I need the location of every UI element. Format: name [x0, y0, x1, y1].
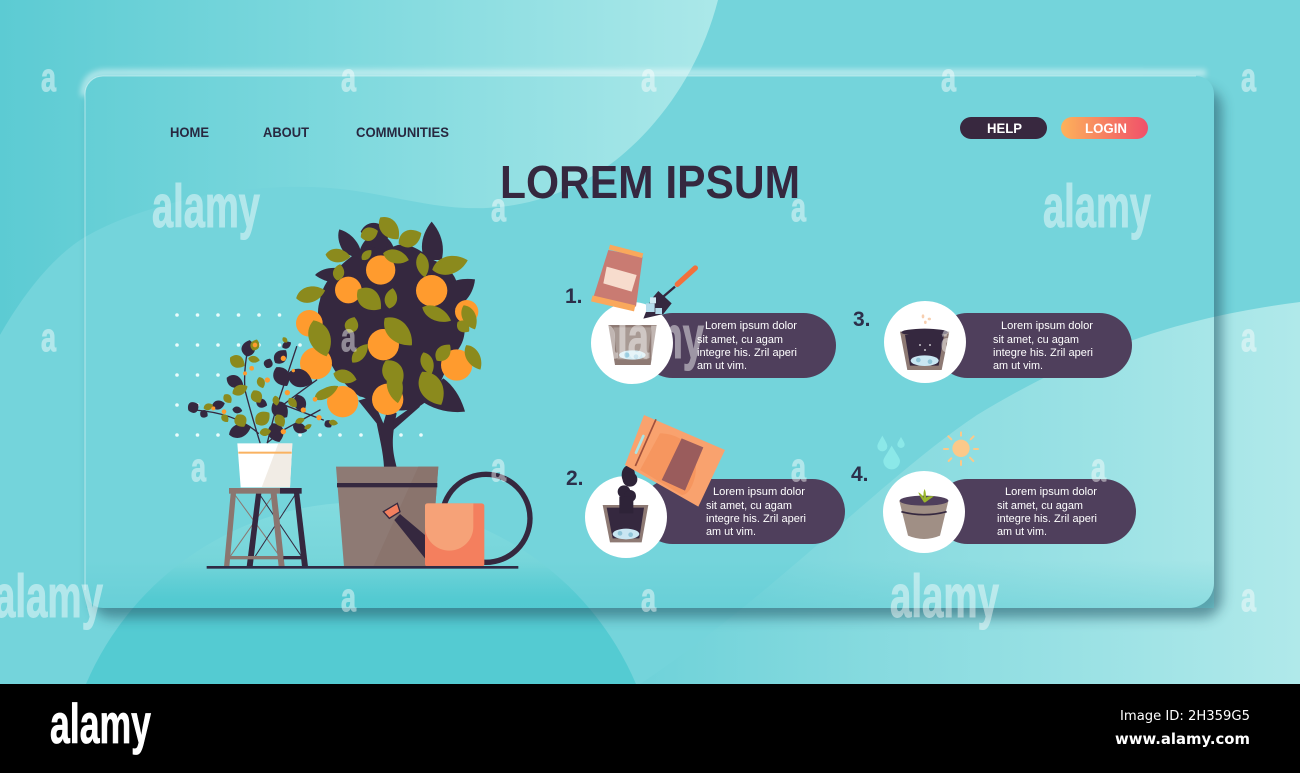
ground line [207, 566, 518, 569]
step 3 icons [900, 314, 949, 370]
icon: stool [224, 488, 308, 567]
watermarks: a [41, 316, 57, 360]
icon: pot with sprout [899, 489, 948, 539]
step 3 text: Lorem ipsum dolor [1001, 320, 1093, 332]
step 1 text: Lorem ipsum dolor [705, 320, 797, 332]
watermarks: a [941, 56, 957, 100]
step 1 [565, 245, 836, 384]
navigation links: ABOUT [263, 125, 310, 140]
footer url: www.alamy.com [1115, 730, 1250, 748]
step 1 icons [591, 245, 695, 365]
watermarks: alamy [596, 304, 704, 371]
icon: sun [944, 432, 978, 465]
step 2 text: sit amet, cu agam [706, 500, 792, 512]
watermarks: alamy [890, 563, 999, 630]
watermarks: a [1091, 446, 1107, 490]
illustration: plants and tools [185, 212, 530, 569]
watermarks [0, 56, 1257, 630]
icon: orange tree [294, 212, 486, 467]
watermarks: a [191, 446, 207, 490]
icon: watering can [383, 474, 530, 567]
step 2 pill [640, 479, 845, 544]
watermarks: a [1241, 576, 1257, 620]
icon: fertilizer bag [591, 245, 643, 311]
step 4 text [997, 486, 1097, 538]
step 4 icons [877, 432, 978, 539]
step 3 text: am ut vim. [993, 360, 1043, 372]
dotted grid [175, 313, 423, 437]
icon: water drops [877, 436, 905, 469]
step 3 circle [884, 301, 966, 383]
step 2 number: 2. [566, 467, 584, 490]
footer logo: alamy [50, 692, 151, 755]
watermarks: a [1241, 56, 1257, 100]
login button: LOGIN [1085, 120, 1127, 136]
step 4 pill [935, 479, 1136, 544]
step 4 text: Lorem ipsum dolor [1005, 486, 1097, 498]
watermarks: a [941, 316, 957, 360]
step 1 text: sit amet, cu agam [697, 334, 783, 346]
icon: large pot [336, 467, 438, 567]
step 3 number: 3. [853, 308, 871, 331]
watermarks: a [641, 576, 657, 620]
step 1 number: 1. [565, 285, 583, 308]
navigation links [170, 125, 449, 140]
step 3 text: integre his. Zril aperi [993, 347, 1093, 359]
watermarks: a [491, 186, 507, 230]
watermarks: a [791, 186, 807, 230]
step 2 [566, 415, 845, 558]
step 1 text [697, 320, 797, 372]
watermarks: a [41, 56, 57, 100]
step 1 pill [640, 313, 836, 378]
icon: trowel [643, 268, 695, 319]
icon: pot with seeds [900, 329, 949, 370]
step 4 [851, 432, 1136, 553]
step 4 text: am ut vim. [997, 526, 1047, 538]
watermarks: a [791, 446, 807, 490]
icon: pot with drainage [608, 325, 657, 365]
step 3 [853, 301, 1132, 383]
watermarks: a [1241, 316, 1257, 360]
step 2 text: Lorem ipsum dolor [713, 486, 805, 498]
watermarks: a [641, 56, 657, 100]
icon: pot with soil [603, 505, 648, 542]
icon: small bush [185, 336, 338, 445]
watermarks: a [341, 576, 357, 620]
watermarks: a [341, 56, 357, 100]
step 4 text: integre his. Zril aperi [997, 513, 1097, 525]
title: LOREM IPSUM [500, 156, 800, 208]
icon: soil bag [625, 415, 725, 507]
watermarks: a [341, 316, 357, 360]
panel: main card [84, 73, 1222, 618]
icon: falling soil [618, 466, 637, 513]
step 2 text: am ut vim. [706, 526, 756, 538]
step 4 text: sit amet, cu agam [997, 500, 1083, 512]
step 3 text: sit amet, cu agam [993, 334, 1079, 346]
icon: seeds [922, 314, 931, 324]
login button [1061, 117, 1148, 139]
step 3 text [993, 320, 1093, 372]
help button [960, 117, 1047, 139]
step 2 circle [585, 476, 667, 558]
step 3 pill [935, 313, 1132, 378]
help button: HELP [987, 120, 1022, 136]
watermarks: a [491, 446, 507, 490]
step 2 text: integre his. Zril aperi [706, 513, 806, 525]
step 2 text [706, 486, 806, 538]
footer image id: Image ID: 2H359G5 [1120, 709, 1250, 724]
step 1 text: am ut vim. [697, 360, 747, 372]
navigation links: COMMUNITIES [356, 125, 449, 140]
watermarks: alamy [1043, 173, 1151, 240]
step 1 circle [591, 302, 673, 384]
watermarks: alamy [152, 173, 260, 240]
navigation links: HOME [170, 125, 209, 140]
step 2 icons [603, 415, 725, 542]
icon: white flower pot [237, 443, 292, 487]
step 4 number: 4. [851, 463, 869, 486]
step 1 text: integre his. Zril aperi [697, 347, 797, 359]
step 4 circle [883, 471, 965, 553]
